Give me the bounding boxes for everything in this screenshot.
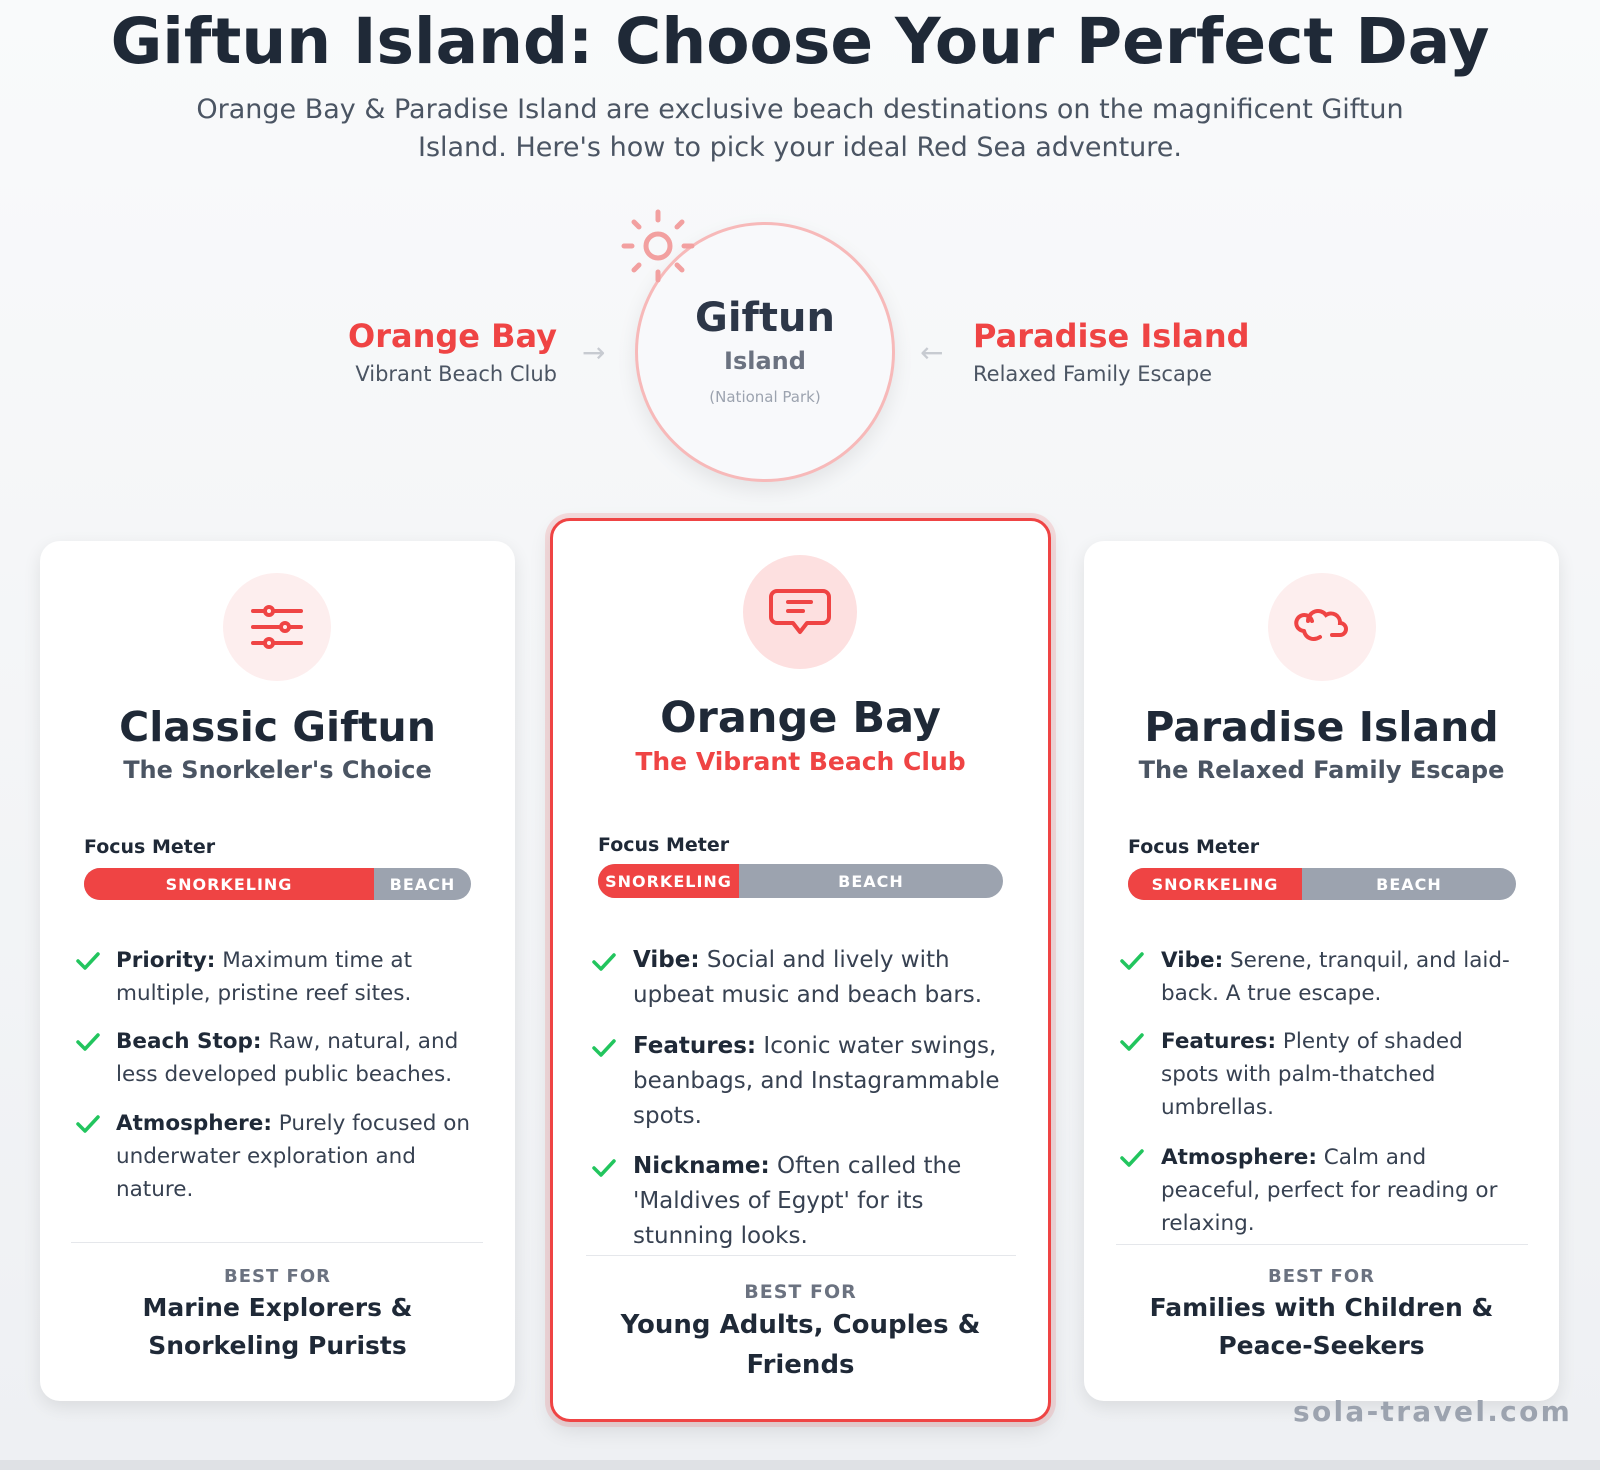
bullets: multiple, pristine reef sites.	[116, 981, 411, 1006]
bullets	[1120, 948, 1510, 1236]
subtitle: Orange Bay & Paradise Island are exclusive beach destinations on the magnificent Giftun	[196, 94, 1404, 125]
label: paradise island	[973, 317, 1250, 386]
focus meter	[598, 834, 1003, 898]
focus meter: BEACH	[1376, 874, 1442, 894]
bullets: Vibe: Serene, tranquil, and laid-	[1161, 948, 1510, 973]
best for: BEST FOR	[744, 1281, 857, 1303]
hub circle: Island	[724, 347, 806, 375]
icon: cloud	[1268, 573, 1376, 681]
bullets: relaxing.	[1161, 1211, 1255, 1236]
bullets: peaceful, perfect for reading or	[1161, 1178, 1497, 1203]
focus meter: SNORKELING	[166, 874, 292, 894]
icon: sun	[622, 210, 694, 282]
focus meter	[1128, 836, 1516, 900]
focus meter: SNORKELING	[605, 872, 732, 890]
watermark: sola-travel.com	[1293, 1395, 1572, 1428]
best for: Young Adults, Couples &	[621, 1310, 980, 1340]
bullets: Beach Stop: Raw, natural, and	[116, 1029, 458, 1054]
best for: Friends	[746, 1350, 855, 1380]
arrow left: ←	[920, 336, 943, 369]
bullets: 'Maldives of Egypt' for its	[633, 1188, 924, 1214]
label: orange bay: Orange Bay	[348, 317, 557, 355]
bullets: Priority: Maximum time at	[116, 948, 412, 973]
title: Giftun Island: Choose Your Perfect Day	[111, 5, 1489, 78]
bullets: Atmosphere: Calm and	[1161, 1145, 1426, 1170]
subtitle	[196, 94, 1404, 163]
label: paradise island: Relaxed Family Escape	[973, 362, 1212, 386]
focus meter: Focus Meter	[598, 834, 729, 856]
bullets: Features: Plenty of shaded	[1161, 1029, 1463, 1054]
focus meter: SNORKELING	[1152, 874, 1278, 894]
bullets: spots.	[633, 1103, 702, 1129]
focus meter: BEACH	[390, 874, 455, 894]
bullets: underwater exploration and	[116, 1144, 416, 1169]
best for: Snorkeling Purists	[148, 1331, 407, 1360]
best for: Peace-Seekers	[1218, 1331, 1425, 1360]
bullets: upbeat music and beach bars.	[633, 982, 982, 1008]
best for: BEST FOR	[1268, 1266, 1375, 1287]
best for: Marine Explorers &	[143, 1293, 412, 1322]
hub circle: Giftun	[695, 295, 835, 341]
bullets	[76, 948, 470, 1202]
bullets: stunning looks.	[633, 1223, 808, 1249]
bullets: umbrellas.	[1161, 1095, 1274, 1120]
bullets: back. A true escape.	[1161, 981, 1381, 1006]
panel: orange bay	[550, 518, 1051, 1422]
best for: BEST FOR	[224, 1266, 331, 1287]
panel: classic giftun: The Snorkeler's Choice	[123, 756, 432, 784]
bullets: nature.	[116, 1177, 193, 1202]
bullets	[592, 947, 1000, 1249]
label: orange bay: Vibrant Beach Club	[355, 362, 557, 386]
label: orange bay	[348, 317, 557, 386]
label: paradise island: Paradise Island	[973, 317, 1250, 355]
best for	[1150, 1266, 1493, 1360]
heading: Orange Bay	[660, 693, 941, 743]
hub circle: (National Park)	[709, 388, 821, 406]
bullets: Features: Iconic water swings,	[633, 1033, 996, 1059]
heading: Paradise Island	[1144, 703, 1499, 751]
panel: paradise island: The Relaxed Family Escape	[1139, 756, 1504, 784]
focus meter: BEACH	[838, 872, 904, 890]
focus meter: Focus Meter	[1128, 836, 1259, 858]
arrow right: →	[582, 336, 605, 369]
best for: Families with Children &	[1150, 1293, 1493, 1322]
bullets: less developed public beaches.	[116, 1062, 452, 1087]
heading: Classic Giftun	[119, 703, 436, 751]
subtitle: Island. Here's how to pick your ideal Red Sea adventure.	[418, 132, 1182, 163]
bullets: Atmosphere: Purely focused on	[116, 1111, 470, 1136]
hub circle	[635, 222, 895, 482]
best for	[143, 1266, 412, 1360]
focus meter: Focus Meter	[84, 836, 215, 858]
panel: classic giftun	[40, 541, 515, 1401]
panel: orange bay: The Vibrant Beach Club	[635, 747, 966, 776]
bullets: Nickname: Often called the	[633, 1153, 961, 1179]
best for	[620, 1281, 980, 1380]
bullets: beanbags, and Instagrammable	[633, 1068, 1000, 1094]
panel: paradise island	[1084, 541, 1559, 1401]
bullets: Vibe: Social and lively with	[633, 947, 950, 973]
icon: chat bubble	[743, 555, 857, 669]
bullets: spots with palm-thatched	[1161, 1062, 1435, 1087]
icon: sliders	[223, 573, 331, 681]
focus meter	[84, 836, 471, 900]
